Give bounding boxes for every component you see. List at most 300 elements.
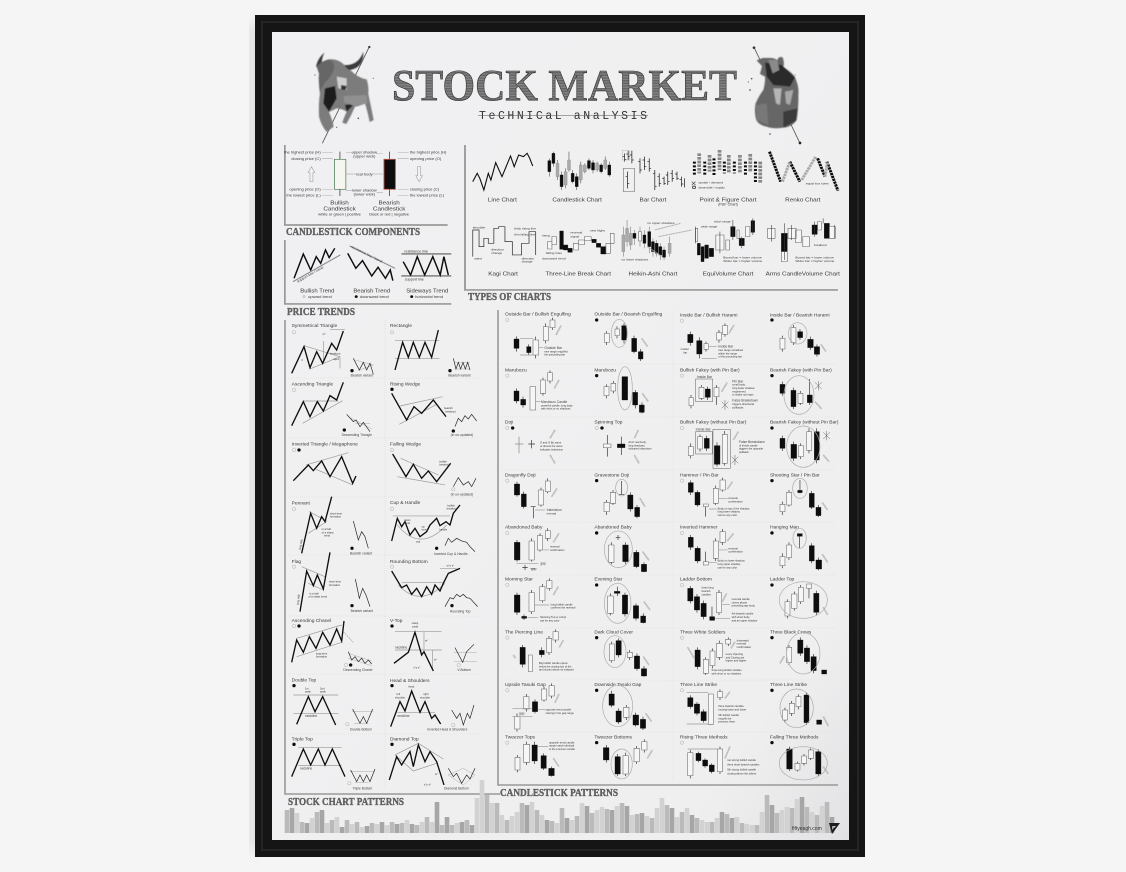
pattern: pennant: short-term (330, 511, 343, 515)
pattern: diamond top: w° (435, 772, 438, 776)
cell: doji: Doji (505, 420, 513, 426)
cell: bullish fakey with pin bar: triggers directional (732, 402, 754, 406)
pattern: pennant: in a halt (322, 527, 331, 531)
pattern: falling wedge (390, 441, 476, 496)
cell: three white soldiers: every Opening (726, 652, 743, 656)
heading: types of charts: TYPES OF CHARTS (468, 292, 551, 303)
cell: three line strike bullish (680, 682, 746, 724)
panel: candlestick components: the highest price (H) (284, 150, 321, 154)
chart: three-line break chart: rising (542, 234, 550, 238)
panel: stock chart patterns (285, 320, 500, 794)
cell: inside bar bullish harami: within the range (718, 351, 738, 355)
pattern: v-top: V-Bottom (457, 668, 471, 672)
cell: abandoned baby bullish: confirmation (550, 548, 565, 552)
pattern: pennant: formation (330, 515, 342, 519)
cell: downside tasuki gap (594, 682, 652, 730)
cell: ladder bottom: bearish (702, 589, 711, 593)
cell: bullish fakey without pin bar: triggers the opposite (739, 447, 764, 451)
sideways trend chart: Sideways Trend (406, 289, 448, 294)
cell: dragonfly doji: Dragonfly Doji (505, 472, 536, 478)
pattern: double top (292, 677, 373, 731)
chart: kagi chart: direction (522, 256, 534, 260)
pattern: diamond top: Diamond Bottom (444, 786, 469, 790)
pattern: rounding bottom: Rounding Bottom (390, 559, 428, 565)
panel: candlestick components: (lower wick) (354, 192, 376, 197)
website credit: fiftyeagh.com (792, 826, 822, 832)
cell: dragonfly doji (505, 472, 562, 518)
cell: outside bar bullish engulfing: Outside Bar / Bullish Engulfing (505, 312, 571, 318)
cell: inverted hammer: can be any color (718, 565, 737, 569)
pattern: flag (292, 552, 373, 613)
cell: marubozu bullish (505, 367, 573, 411)
cell: three white soldiers: three long bullish candles (712, 668, 742, 672)
panel: candlestick components: white or green | positive (318, 212, 361, 217)
chart: bar chart: Bar Chart (640, 198, 667, 203)
cell: outside bar bearish engulfing: Outside Bar / Bearish Engulfing (594, 312, 663, 318)
cell: piercing line (505, 629, 574, 672)
cell: bullish fakey with pin bar: Bullish Fakey (with Pin Bar) (680, 367, 740, 373)
cell: hanging man: Hanging Man (770, 525, 799, 531)
pattern: cup and handle: bullish (447, 504, 455, 508)
cell: piercing line: Big bullish candle opens (539, 661, 568, 665)
cell: marubozu bullish: Marubozu Candle (541, 400, 567, 404)
cell: doji: O and O·By same (540, 441, 562, 445)
cell: ladder top: Ladder Top (770, 577, 795, 583)
pattern: rising wedge: (in un-updated) (451, 433, 473, 437)
subtitle: TeCHNICaL aNaLYSIS (479, 110, 647, 123)
pattern: v-top: peak (412, 624, 419, 628)
illustration: bear (748, 46, 801, 144)
pattern: v-top: sharp (412, 621, 419, 625)
chart: three-line break chart: downward trend (542, 256, 566, 260)
chart: three-line break chart: falling lines (546, 251, 563, 255)
bearish trend chart: downward trend (360, 294, 389, 299)
pattern: double top: 2nd (320, 686, 325, 690)
bullish trend chart: Bullish Trend (300, 289, 334, 294)
cell: piercing line: below the closing low of the (539, 664, 572, 668)
cell: hammer pin bar (680, 472, 750, 517)
cell: abandoned baby bullish: gap (540, 561, 546, 565)
pattern: cup and handle: trend (404, 521, 411, 525)
chart: kagi chart: thin falling line (514, 232, 535, 236)
cell: three line strike bullish: 4th bullish candle (718, 713, 739, 717)
logo (829, 823, 840, 834)
cell: spinning top: Spinning Top (594, 420, 623, 426)
cell: bearish fakey with pin bar: Bearish Fakey (with Pin Bar) (770, 367, 832, 373)
cell: three line strike bullish: engulfs the (718, 716, 732, 720)
cell: bullish fakey with pin bar: Inside Bar (697, 375, 713, 379)
cell: three white soldiers: and Closing are (726, 655, 745, 659)
cell: hanging man (770, 525, 828, 570)
chart: equivolume chart (696, 218, 762, 278)
pattern: rising wedge (390, 382, 477, 437)
panel: candlestick components: closing price (C) (410, 187, 440, 191)
cell: bullish fakey without pin bar: Bullish Fakey (without Pin Bar) (680, 420, 747, 426)
pattern: head and shoulders: neckline (397, 714, 410, 718)
pattern: v-top (390, 618, 477, 672)
pattern: ascending channel: long-term (316, 651, 328, 655)
pattern: ascending channel: Descending Chanel (343, 668, 373, 672)
cell: three white soldiers: reversal (737, 642, 746, 646)
chart: renko chart: Renko Chart (785, 198, 821, 203)
bearish trend chart: Bearish Trend (353, 289, 390, 294)
pattern: triple top: Triple Top (292, 736, 313, 742)
cell: rising three methods: Rising Three Methods (680, 734, 728, 740)
cell: upside tasuki gap: opposite trend candle (546, 708, 572, 712)
pattern: head and shoulders: shoulder (420, 695, 430, 699)
pattern: head and shoulders: left (397, 692, 400, 696)
chart: candlestick chart (548, 152, 611, 203)
cell: evening star (594, 577, 650, 623)
cell: three line strike bullish: previous three (718, 720, 736, 724)
panel: candlestick components: opening price (O) (410, 156, 442, 161)
cell: three white soldiers (680, 629, 752, 675)
chart: arms candlevolume chart: Boxed bar = lower volume (795, 255, 834, 259)
cell: ladder bottom: and an upper shadow (732, 618, 757, 622)
pattern: cup and handle: trend (422, 528, 428, 532)
cell: abandoned baby bearish (594, 525, 649, 572)
pattern: ascending triangle (292, 382, 372, 437)
panel: price trends (285, 240, 451, 304)
pattern: ascending channel: formation (316, 655, 328, 659)
panel: candlestick components: Candlestick (373, 207, 405, 212)
pattern: head and shoulders: shoulder (395, 695, 405, 699)
pattern: v-top: w° (434, 657, 437, 661)
chart: arms candlevolume chart: Arms CandleVolume Chart (766, 272, 840, 278)
cell: abandoned baby bullish: reversal (550, 545, 560, 549)
cell: three line strike bullish: Three Line Strike (680, 682, 717, 688)
cell: three black crows: Three Black Crows (770, 629, 812, 635)
cell: morning star: Spinning Top or a Doji (540, 615, 566, 619)
pattern: flag: of a sharp trend (308, 595, 327, 599)
chart: point and figure chart: upside / demand (698, 180, 723, 184)
pattern: triple top (292, 736, 375, 790)
pattern: cup and handle: Inverted Cup & Handle (434, 552, 468, 556)
chart: three-line break chart: signal (570, 234, 579, 238)
cell: shooting star pin bar (770, 472, 828, 517)
pattern: flag: Bearish variant (351, 609, 373, 613)
cell: marubozu bullish: with short or no shadows (541, 407, 571, 411)
pattern: head and shoulders: head (408, 685, 415, 689)
chart: three-line break chart (542, 229, 614, 278)
cell: ladder bottom: reversal candle (732, 597, 750, 601)
chart: kagi chart (473, 226, 536, 278)
pattern: inverted triangle megaphone: Inverted Triangle / Megaphone (292, 441, 358, 447)
cell: bullish fakey with pin bar: small body, (732, 383, 746, 387)
chart: equivolume chart: short range (714, 220, 731, 224)
heading: stock chart patterns: STOCK CHART PATTERNS (288, 797, 404, 808)
cell: three line strike bearish (770, 682, 828, 728)
pattern: rounding bottom: Rounding Top (450, 610, 471, 614)
pattern: falling wedge: Falling Wedge (390, 441, 421, 447)
panel: candlestick components: closing price (C) (291, 156, 321, 161)
pattern: diamond top (389, 736, 475, 790)
pattern: falling wedge: (in un-updated) (451, 492, 473, 496)
cell: ladder bottom: closes above (732, 600, 748, 604)
illustration: bull (314, 46, 374, 143)
cell: falling three methods (770, 734, 828, 780)
cell: bearish fakey without pin bar: Bearish Fakey (without Pin Bar) (770, 420, 839, 426)
chart: point and figure chart (692, 150, 760, 206)
chart: heikin-ashi chart: Heikin-Ashi Chart (629, 272, 678, 278)
pattern: ascending channel (292, 618, 373, 672)
cell: inverted hammer: reversal (728, 546, 738, 550)
pattern: rectangle: Bearish variant (448, 374, 471, 378)
cell: tweezer tops: range match identical (549, 744, 575, 748)
cell: outside bar bullish engulfing: Outside Bar (544, 346, 563, 350)
cell: three black crows (770, 629, 827, 674)
cell: tweezer bottoms (594, 734, 652, 779)
cell: inside bar bullish harami: bar (683, 350, 687, 354)
arrow up (308, 167, 315, 182)
chart: kagi chart: shoulder (473, 226, 485, 230)
pattern: symmetrical triangle: breakout (330, 351, 341, 355)
panel: candlestick components: lower shadow (352, 188, 377, 193)
cell: tweezer bottoms: Tweezer Bottoms (594, 734, 633, 740)
sideways trend chart: support line (405, 277, 424, 281)
chart: arms candlevolume chart: Wider bar = higher volume (795, 259, 835, 263)
panel: candlestick components: Bearish (379, 201, 400, 207)
pattern: head and shoulders: Inverted Head & Shoulders (427, 727, 468, 731)
pattern: flag: formation (329, 583, 341, 587)
cell: upside tasuki gap (505, 682, 574, 732)
pattern: pennant (292, 497, 372, 555)
cell: downside tasuki gap: Downside Tasuki Gap (594, 682, 642, 688)
pattern: rising wedge: bearish (444, 406, 453, 410)
cell: ladder bottom (680, 577, 757, 622)
chart: renko chart (770, 152, 838, 203)
chart: line chart: Line Chart (488, 198, 517, 203)
cell: bullish fakey with pin bar: engineered (732, 389, 746, 393)
pattern: head and shoulders: right (423, 692, 429, 696)
chart: arms candlevolume chart: breakout (814, 243, 827, 247)
pattern: cup and handle: Cup & Handle (390, 500, 421, 506)
chart: renko chart: equal box sizes (806, 182, 829, 186)
pattern: pennant: Bearish variant (350, 551, 372, 555)
cell: inverted hammer: Body on lower shadow, (718, 559, 745, 563)
pattern: double top: 1st (305, 686, 309, 690)
pattern: flag: short-term (329, 580, 342, 584)
cell: three white soldiers: higher and higher (726, 659, 746, 663)
cell: bearish fakey with pin bar (770, 367, 832, 414)
panel: candlestick components: opening price (O) (289, 187, 321, 191)
heading: candlestick patterns: CANDLESTICK PATTERNS (500, 788, 618, 799)
cell: morning star: can be any color (540, 618, 560, 622)
pattern: diamond top: z°y·z° (424, 783, 431, 787)
panel: candlestick components (284, 145, 448, 225)
bearish trend chart: resistance line / trend (350, 245, 383, 263)
chart: bar chart (622, 151, 684, 203)
cell: marubozu bullish: powerful candle, long body (541, 403, 573, 407)
pattern: pennant: of a sharp (322, 530, 334, 534)
heading: candlestick components: CANDLESTICK COMPONENTS (286, 227, 420, 238)
cell: ladder bottom: with short body (732, 615, 750, 619)
chart: line chart (473, 153, 533, 203)
cell: upside tasuki gap: Upside Tasuki Gap (505, 682, 546, 688)
bullish trend chart: upward trend (308, 294, 332, 299)
cell: rising three methods: 5th strong bullish candle (727, 768, 756, 772)
cell: dark cloud cover (594, 629, 649, 677)
pattern: symmetrical triangle: apex (333, 358, 340, 361)
sideways trend chart: horizontal trend (415, 294, 443, 299)
chart: kagi chart: thick rising line (514, 226, 536, 230)
cell: falling three methods: Falling Three Methods (770, 734, 819, 740)
chart: kagi chart: change (522, 260, 533, 264)
pattern: double top: neckline (305, 714, 317, 718)
cell: morning star: long bullish candle (551, 602, 573, 606)
cell: bullish fakey without pin bar: False Breakdown (739, 440, 765, 444)
panel: candlestick components: real body (356, 172, 373, 176)
chart: equivolume chart: Boxed bar = lower volume (723, 255, 762, 259)
chart: three-line break chart: Three-Line Break Chart (545, 272, 611, 278)
chart: candlestick chart: Candlestick Chart (552, 198, 602, 203)
cell: inside bar bullish harami: mother (681, 347, 689, 351)
cell: morning star (505, 577, 576, 622)
pattern: rounding bottom: w°y·z° (447, 563, 454, 567)
bearish trend chart (348, 245, 395, 299)
panel: candlestick components: the highest price (H) (410, 150, 447, 154)
panel: candlestick components: black or red | negative (369, 212, 409, 217)
panel: candlestick components: (upper wick) (353, 154, 376, 159)
pattern: cup and handle: down (404, 518, 411, 522)
cell: bullish fakey with pin bar: Pin Bar (732, 379, 744, 383)
cell: gravestone doji (594, 472, 645, 518)
cell: hammer pin bar: Body on top of the shadow, (718, 506, 750, 510)
arrow down (416, 167, 422, 182)
cell: rising three methods: closing above the others (727, 772, 757, 776)
cell: tweezer tops: Tweezer Tops (505, 734, 536, 740)
pattern: triple top: Triple Bottom (353, 786, 373, 790)
cell: tweezer tops: to the previous candle (549, 747, 576, 751)
chart: equivolume chart: Wider bar = higher volume (723, 259, 762, 263)
cell: ladder bottom: Ladder Bottom (680, 577, 712, 583)
cell: inside bar bullish harami: Inside Bar / Bullish Harami (680, 312, 737, 318)
cell: inside bar bearish harami: Inside Bar / Bearish Harami (770, 312, 830, 318)
cell: spinning top: short real body, (628, 440, 647, 444)
chart: kagi chart: waist (474, 256, 482, 260)
skyline bar graphic (287, 780, 832, 833)
cell: abandoned baby bearish: Abandoned Baby (594, 525, 632, 531)
cell: bullish fakey with pin bar: to shake out traps (732, 393, 754, 397)
chart: arms candlevolume chart (766, 218, 840, 278)
pattern: falling wedge: bullish (439, 459, 447, 463)
pattern: double top: Double Top (292, 677, 317, 683)
pattern: v-top: neckline (395, 645, 407, 649)
cell: ladder bottom: three long (702, 586, 714, 590)
chart: kagi chart: Kagi Chart (488, 272, 518, 278)
pattern: ascending triangle: Ascending Triangle (292, 382, 333, 388)
pattern: inverted triangle megaphone (292, 441, 358, 485)
cell: ladder bottom: candles (702, 592, 711, 596)
cell: bullish fakey with pin bar: False Breakdown (732, 399, 758, 403)
pattern: cup and handle: breakout (447, 507, 457, 511)
cell: evening star: Evening Star (594, 577, 623, 583)
cell: dark cloud cover: Dark Cloud Cover (594, 629, 633, 635)
cell: spinning top (594, 420, 652, 463)
cell: outside bar bullish engulfing: new range engulfed (544, 349, 568, 353)
cell: bullish fakey with pin bar: long lower shadow, (732, 386, 755, 390)
cell: inverted hammer: confirmation (728, 550, 743, 554)
pattern: double top: peak (320, 690, 326, 694)
cell: bullish fakey without pin bar: of Inside candle (739, 443, 758, 447)
pattern: pennant: trend (324, 534, 331, 538)
chart: equivolume chart: wide range (701, 224, 718, 228)
cell: inside bar bullish harami (680, 312, 743, 359)
cell: tweezer tops: opposite trend candle (549, 740, 575, 744)
chart: equivolume chart: EquiVolume Chart (703, 272, 754, 278)
cell: dragonfly doji: reversal (547, 511, 557, 515)
cell: shooting star pin bar: Shooting Star / Pin Bar (770, 472, 820, 478)
cell: spinning top: indicates indecision (628, 447, 652, 451)
cell: inside bar bullish harami: of the preceding bar (718, 355, 742, 359)
pattern: ascending triangle: Descending Triangle (342, 433, 372, 437)
cell: inverted hammer: long upper shadow, (718, 562, 741, 566)
pattern: rising wedge: Rising Wedge (390, 382, 421, 388)
cell: ladder top (770, 577, 828, 618)
cell: bullish fakey without pin bar: Inside Bar (696, 427, 712, 431)
cell: piercing line: and closes above its midpoint (539, 668, 574, 672)
cell: bullish fakey without pin bar (680, 420, 765, 468)
cell: inside bar bullish harami: new range contained (718, 348, 743, 352)
cell: outside bar bullish engulfing: the preceding bar (544, 353, 565, 357)
panel: candlestick components: Bullish (330, 201, 349, 207)
cell: doji: or almost the same (540, 444, 563, 448)
cell: marubozu bearish: Marubozu (594, 367, 616, 373)
pattern: v-top: V-Top (390, 618, 403, 624)
chart: heikin-ashi chart: no lower shadows (622, 258, 648, 262)
cell: hammer pin bar: confirmation (728, 499, 743, 503)
cell: doji: indicates indecision (540, 447, 564, 451)
cell: gravestone doji: Gravestone Doji (594, 472, 629, 478)
cell: morning star: Morning Star (505, 577, 533, 583)
cell: tweezer tops (505, 734, 576, 777)
pattern: rounding bottom (390, 559, 478, 614)
pattern: symmetrical triangle: h (302, 358, 304, 362)
cell: ladder bottom: 4th bearish candle (732, 612, 754, 616)
cell: three line strike bullish: three bearish candles (718, 704, 744, 708)
pattern: pennant: long rally (298, 538, 304, 550)
cell: bearish fakey without pin bar (770, 420, 839, 467)
cell: morning star: confirms the reversal (551, 606, 576, 610)
pattern: double top: peak (305, 690, 311, 694)
cell: three line strike bullish: moving lower and lower (718, 707, 746, 711)
pattern: pennant: Pennant (292, 501, 310, 507)
pattern: symmetrical triangle: Bearish variant (351, 374, 373, 378)
pattern: diamond top: Diamond Top (390, 736, 419, 742)
pattern: cup and handle (390, 500, 475, 556)
pattern: v-top: w° (425, 639, 428, 643)
bullish candlestick (334, 152, 346, 196)
cell: hammer pin bar: long lower shadow, (718, 510, 740, 514)
cell: marubozu bearish (594, 367, 648, 413)
sideways trend chart: resistance line (404, 250, 428, 254)
cell: hammer pin bar: reversal (728, 496, 738, 500)
pattern: rectangle: Rectangle (390, 323, 412, 329)
panel: candlestick components: Candlestick (323, 207, 356, 212)
chart: heikin-ashi chart: no upper shadows (647, 221, 675, 225)
cell: three white soldiers: Three White Soldiers (680, 629, 726, 635)
panel: candlestick patterns (498, 310, 839, 785)
cell: upside tasuki gap: closing in the gap range (546, 711, 574, 715)
pattern: head and shoulders: Head & Shoulders (390, 678, 430, 684)
pattern: ascending channel: Ascending Chanel (292, 618, 331, 624)
chart: three-line break chart: reversal (570, 230, 583, 234)
pattern: rectangle (390, 323, 471, 378)
pattern: cup and handle: up (422, 526, 425, 529)
cell: bullish fakey without pin bar: pullback (739, 450, 749, 454)
pattern: triple top: neckline (300, 767, 312, 771)
cell: upside tasuki gap: gap (519, 711, 525, 715)
